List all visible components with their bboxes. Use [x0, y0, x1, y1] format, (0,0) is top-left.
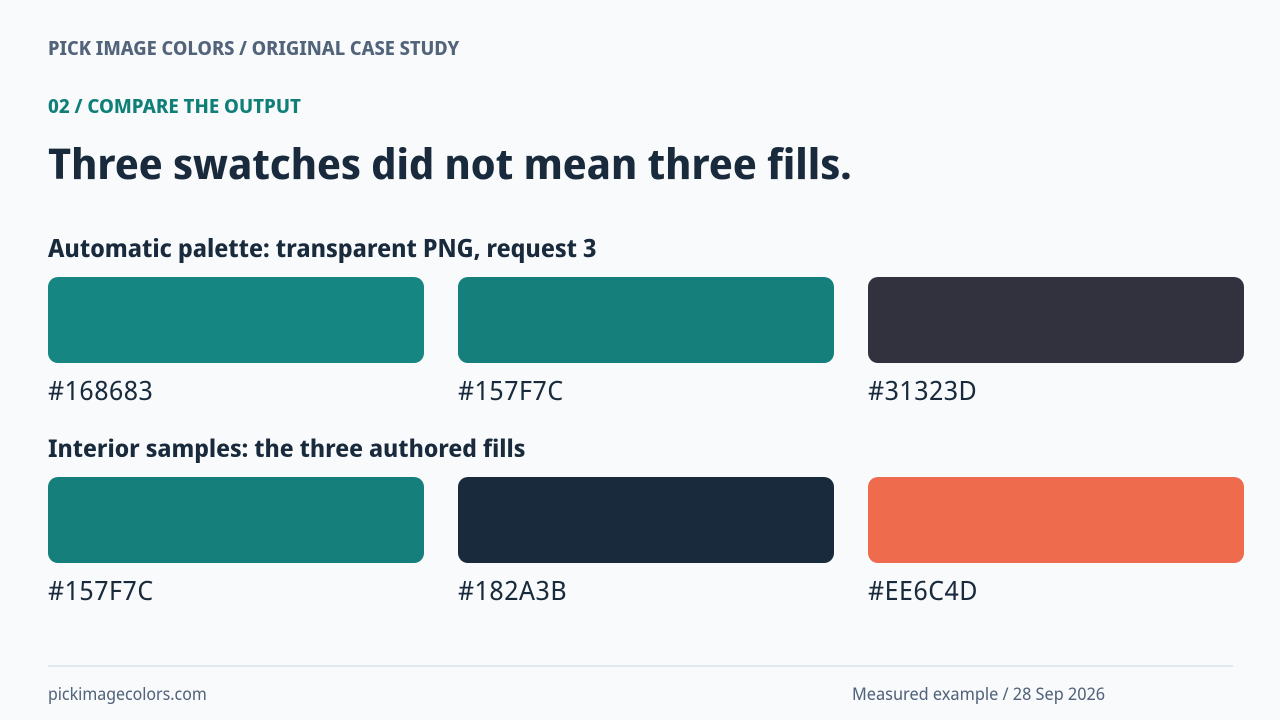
swatch: #182A3B — [458, 477, 834, 563]
label: #182A3B: #182A3B — [458, 572, 567, 608]
footer: measured date: Measured example / 28 Sep 2026 — [852, 683, 1105, 706]
section label: 02 / COMPARE THE OUTPUT — [48, 92, 301, 119]
swatch: #31323D — [868, 277, 1244, 363]
swatch: #157F7C — [458, 277, 834, 363]
eyebrow: brand and case study: PICK IMAGE COLORS / ORIGINAL CASE STUDY — [48, 34, 459, 61]
label: #157F7C second row: #157F7C — [48, 572, 154, 608]
swatch: #157F7C second row — [48, 477, 424, 563]
title: Three swatches did not mean three fills. — [48, 135, 852, 192]
footer rule — [48, 665, 1233, 667]
label: #157F7C: #157F7C — [458, 372, 564, 408]
swatch: #EE6C4D — [868, 477, 1244, 563]
label: #31323D: #31323D — [868, 372, 977, 408]
footer: site: pickimagecolors.com — [48, 682, 207, 705]
label: #EE6C4D: #EE6C4D — [868, 572, 978, 608]
heading: interior samples: Interior samples: the three authored fills — [48, 432, 525, 465]
swatch: #168683 — [48, 277, 424, 363]
heading: automatic palette: Automatic palette: transparent PNG, request 3 — [48, 232, 596, 265]
label: #168683: #168683 — [48, 372, 153, 408]
